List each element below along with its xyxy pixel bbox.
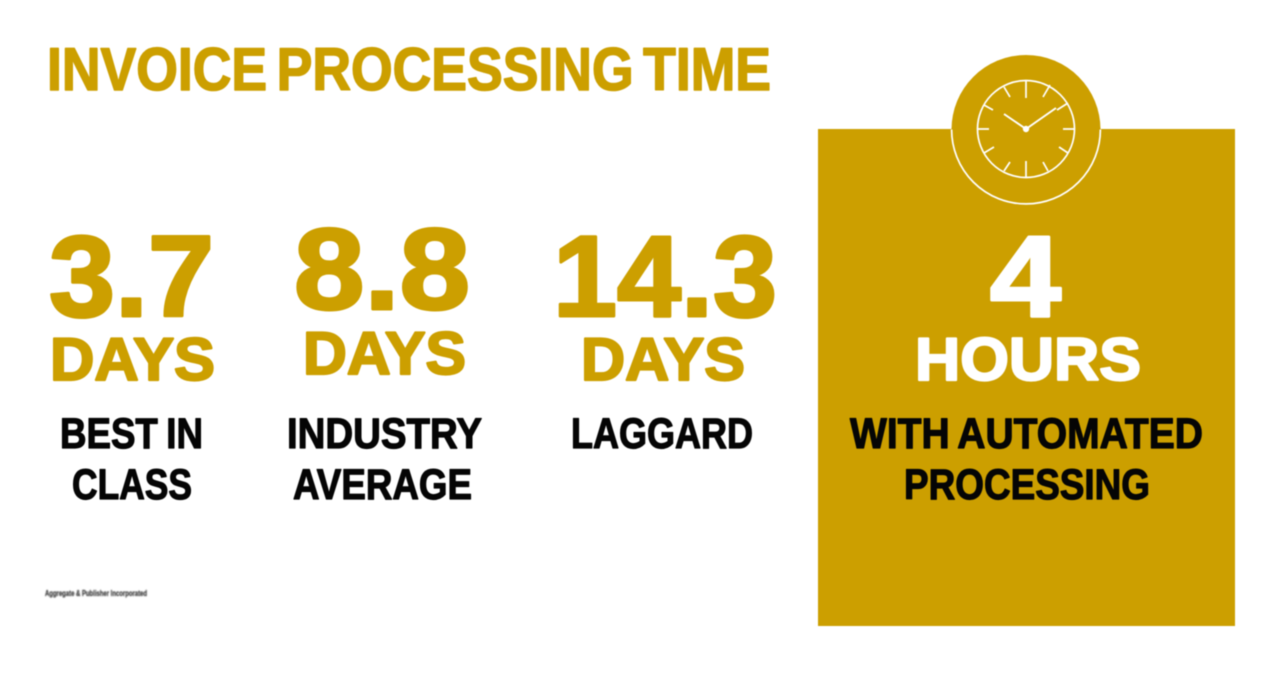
stat: industry average — [287, 206, 482, 509]
label: best in class: CLASS — [72, 461, 192, 509]
panel background — [818, 129, 1235, 626]
unit: days: DAYS — [581, 326, 745, 393]
value: 8.8: 8.8 — [294, 206, 470, 334]
label: with automated processing: WITH AUTOMATED — [850, 410, 1203, 458]
panel: automated processing — [818, 129, 1235, 626]
value: 4: 4 — [990, 213, 1061, 341]
footnote: Aggregate & Publisher Incorporated — [45, 588, 147, 598]
unit: days: DAYS — [50, 326, 215, 393]
label: industry average: INDUSTRY — [287, 410, 482, 458]
label: with automated processing — [850, 410, 1203, 509]
unit: hours: HOURS — [915, 326, 1141, 393]
stat: laggard — [553, 213, 777, 458]
icon: clock — [952, 55, 1100, 204]
value: 14.3: 14.3 — [553, 213, 777, 341]
label: best in class — [60, 410, 203, 509]
label: laggard: LAGGARD — [571, 410, 753, 458]
label: industry average: AVERAGE — [293, 461, 472, 509]
title: INVOICE PROCESSING TIME — [47, 36, 771, 103]
stat: best in class — [49, 213, 215, 509]
unit: days: DAYS — [303, 320, 466, 387]
value: 3.7: 3.7 — [49, 213, 214, 341]
label: industry average — [287, 410, 482, 509]
label: best in class: BEST IN — [60, 410, 203, 458]
label: with automated processing: PROCESSING — [904, 461, 1150, 509]
